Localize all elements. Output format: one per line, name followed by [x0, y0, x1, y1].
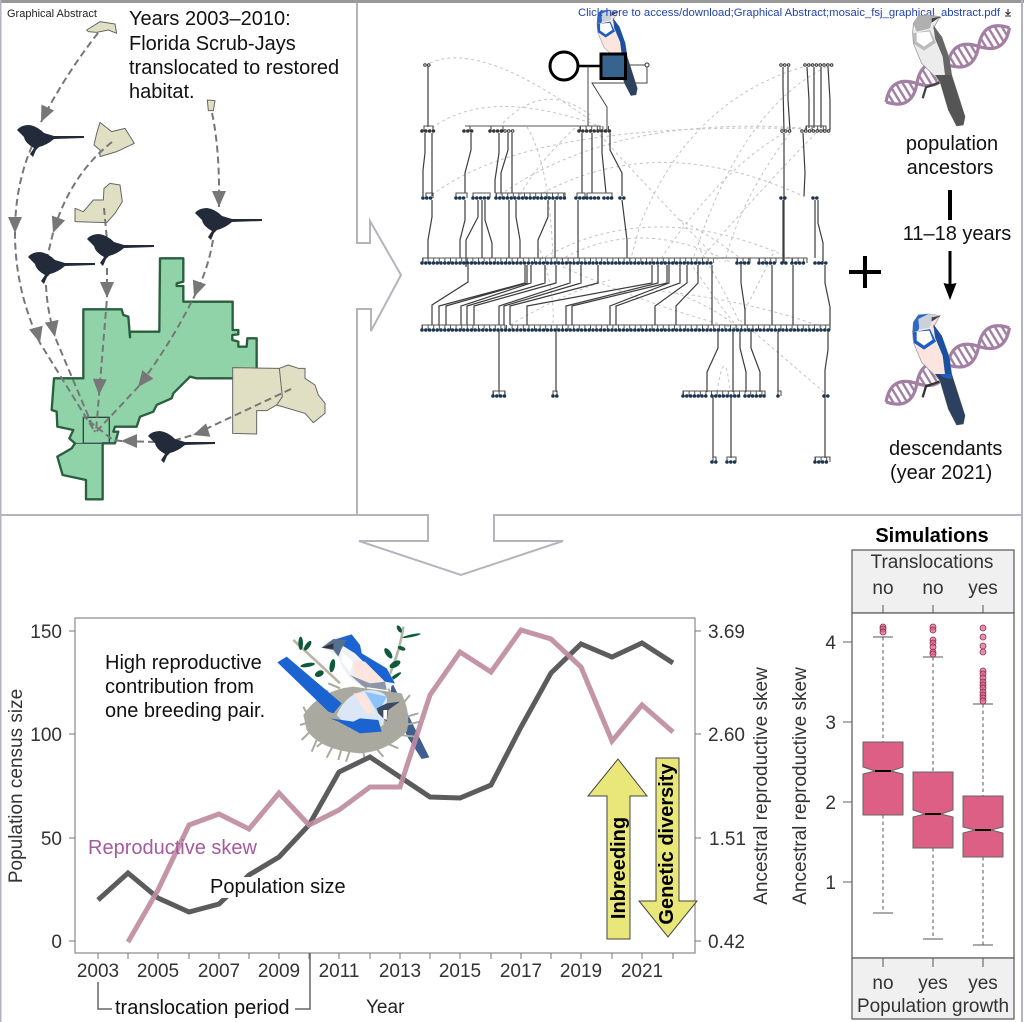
chart: left axis: 150 — [30, 622, 62, 643]
text: descendants: (year 2021) — [890, 462, 992, 484]
text: high reproductive contribution: High reproductive — [105, 652, 262, 674]
chart: left axis — [30, 622, 75, 953]
text: high reproductive contribution: contribution from — [105, 676, 254, 698]
chart: x axis: 2009 — [258, 961, 300, 982]
strip: translocations: Translocations — [871, 552, 993, 573]
boxplot panel: 2 — [825, 793, 836, 814]
chart: right axis — [695, 622, 746, 953]
strip: translocations: no — [872, 578, 894, 599]
plus sign — [849, 256, 881, 288]
text block: translocation years: habitat. — [129, 81, 195, 103]
pedigree: founding pair symbols — [550, 52, 649, 130]
header link text: Click here to access/download;Graphical Abstract;mosaic_fsj_graphical_abstract.pdf — [578, 7, 1001, 19]
icon: descendant DNA — [881, 319, 1015, 411]
chart: x axis: 2011 — [319, 961, 359, 982]
strip: population growth: Population growth — [857, 996, 1009, 1017]
bracket: translocation period: translocation period — [115, 997, 290, 1019]
text block: translocation years: Years 2003–2010: — [129, 8, 291, 30]
boxplot panel: 4 — [825, 633, 836, 654]
text block: translocation years: Florida Scrub-Jays — [129, 33, 296, 55]
chart: left axis: 100 — [30, 725, 62, 746]
text block: translocation years: translocated to restored — [129, 57, 339, 79]
arrow: genetic diversity — [639, 758, 697, 937]
arrow: down to descendants — [944, 251, 956, 300]
arrow: upper bar — [948, 190, 952, 220]
pedigree: dashed links — [430, 58, 826, 393]
icon: download mark — [1005, 9, 1011, 16]
strip: translocations: yes — [968, 578, 998, 599]
chart: left axis: 0 — [51, 932, 62, 953]
map: habitat patches — [52, 22, 325, 499]
pedigree: individuals — [422, 65, 832, 462]
chart: x axis: 2021 — [621, 961, 663, 982]
chart: x axis: 2019 — [560, 961, 602, 982]
arrow: inbreeding: Inbreeding — [608, 817, 630, 919]
chart: right axis: 2.60 — [708, 725, 745, 746]
pedigree: sibling brackets — [422, 126, 830, 462]
chart: x axis: 2003 — [77, 961, 119, 982]
icon: ancestor jay — [913, 15, 965, 126]
icon: blue jay behind pedigree founder — [597, 10, 637, 96]
text: population ancestors: population — [906, 133, 998, 155]
boxplot panel: 1 — [825, 873, 836, 894]
text: descendants: descendants — [889, 438, 1002, 460]
arrow: inbreeding — [588, 759, 647, 939]
label: population size: Population size — [210, 876, 346, 898]
bracket: translocation period — [98, 953, 310, 1019]
chart: right axis: 0.42 — [708, 932, 745, 953]
text: high reproductive contribution: one breeding pair. — [105, 700, 265, 722]
strip: translocations — [852, 550, 1014, 613]
chart: x axis: 2017 — [500, 961, 542, 982]
chart: x axis: 2007 — [198, 961, 240, 982]
chart: left axis: 50 — [41, 829, 62, 850]
chart: x axis: 2013 — [379, 961, 421, 982]
line chart frame — [75, 618, 695, 953]
icon: descendant jay — [913, 314, 965, 425]
chart: right axis: 1.51 — [709, 829, 746, 850]
chart: left axis title: Population census size — [6, 689, 27, 883]
icon: ancestor DNA — [881, 19, 1015, 111]
heading: simulations: Simulations — [875, 525, 989, 547]
x axis title: Year — [366, 997, 405, 1018]
pedigree: solid descent lines — [423, 65, 830, 458]
chart: right axis title: Ancestral reproductive skew — [751, 667, 772, 905]
strip: population growth: yes — [968, 973, 998, 994]
boxplot panel: 3 — [825, 713, 836, 734]
strip: population growth — [852, 958, 1014, 1019]
icons: bird silhouettes — [17, 125, 262, 463]
chart: x axis: 2015 — [439, 961, 481, 982]
text: population ancestors: ancestors — [907, 157, 993, 179]
chart: x axis — [77, 953, 673, 982]
arrow: genetic diversity: Genetic diversity — [656, 763, 678, 925]
dashed translocation arrows — [8, 33, 291, 448]
chart: x axis: 2005 — [137, 961, 179, 982]
strip: translocations: no — [922, 578, 944, 599]
strip: population growth: yes — [918, 973, 948, 994]
line: population size — [98, 643, 673, 912]
text: time span: 11–18 years — [903, 223, 1011, 245]
chart: right axis: 3.69 — [708, 622, 745, 643]
label: reproductive skew: Reproductive skew — [88, 837, 258, 859]
nest illustration — [277, 625, 429, 762]
strip: population growth: no — [872, 973, 894, 994]
boxplot axis title: Ancestral reproductive skew — [790, 667, 811, 905]
boxplot panel — [825, 613, 1014, 958]
line: reproductive skew — [128, 630, 673, 942]
label: graphical abstract: Graphical Abstract — [7, 8, 97, 20]
